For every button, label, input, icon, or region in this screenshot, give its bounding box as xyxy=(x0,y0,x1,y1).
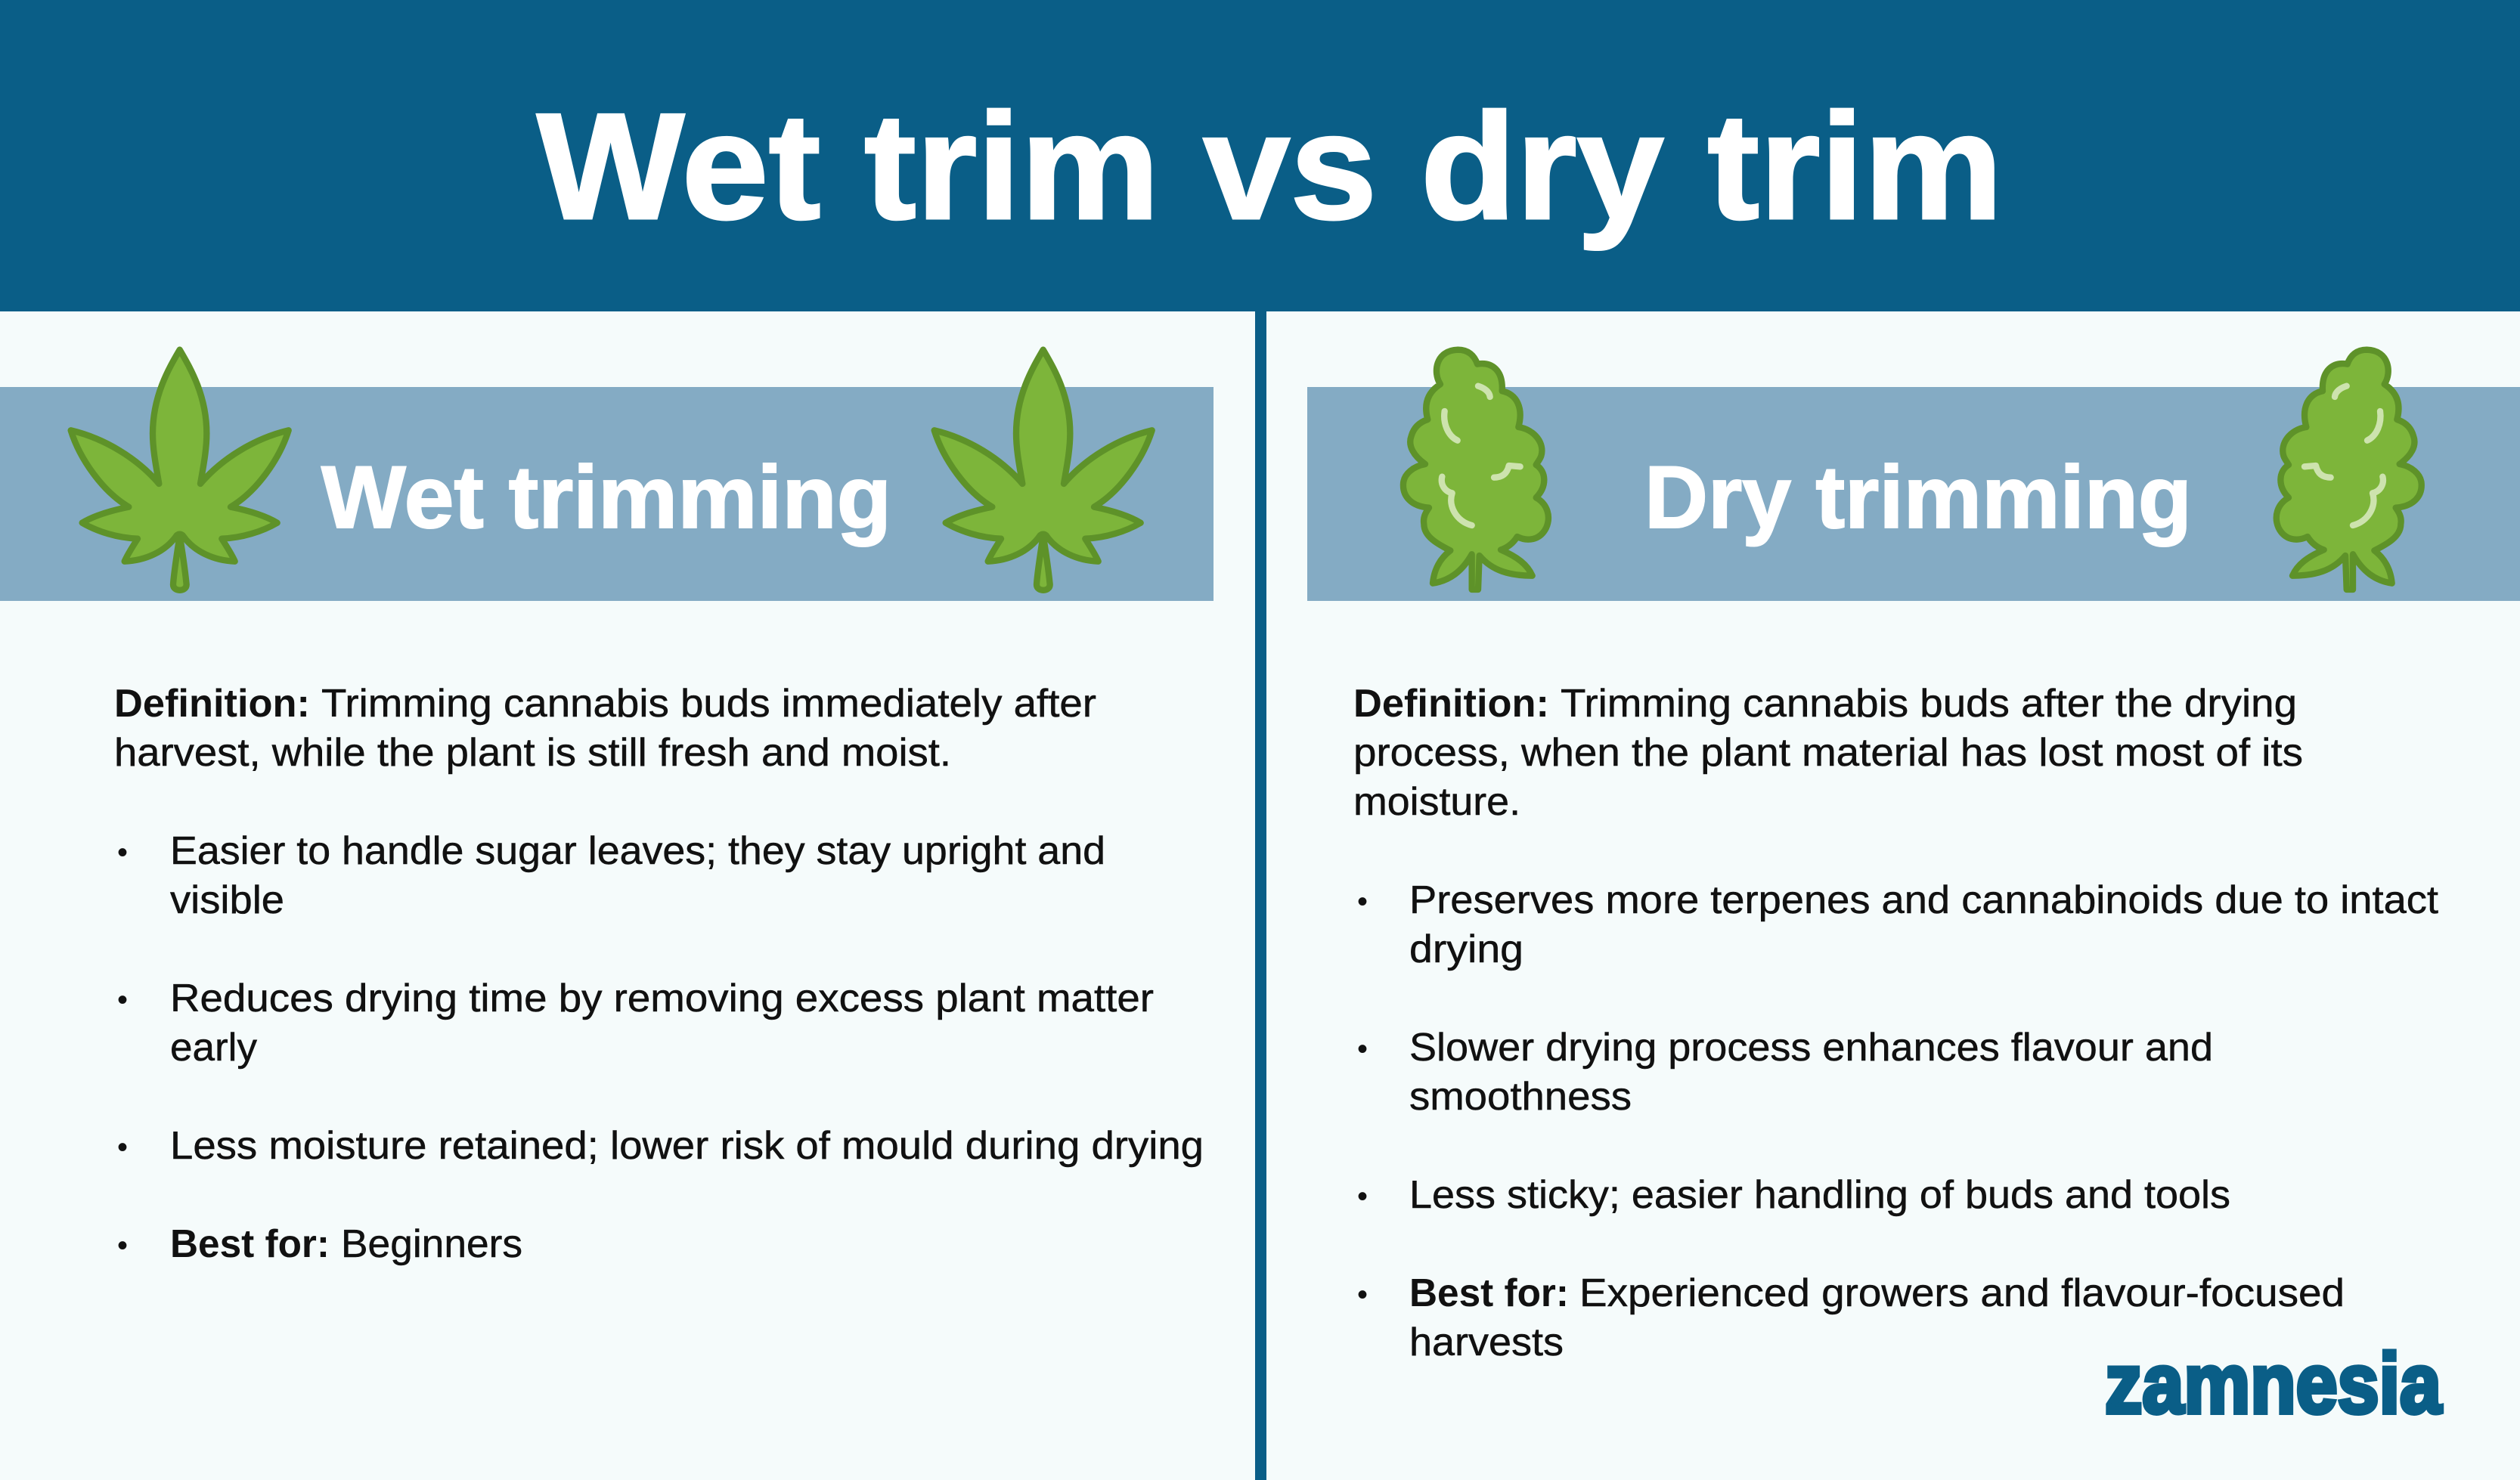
dry trimming best for: harvests xyxy=(1409,1321,1564,1364)
icon: cannabis bud left xyxy=(1403,350,1548,590)
dry trimming best for: • xyxy=(1357,1278,1368,1311)
dry trimming bullet 1: drying xyxy=(1409,927,1523,971)
title: Wet trim vs dry trim xyxy=(537,82,2003,251)
wet trimming bullet 2 xyxy=(117,977,1154,1070)
wet trimming bullet 2: early xyxy=(170,1026,257,1070)
wet trimming bullet 3: Less moisture retained; lower risk of mould during drying xyxy=(170,1124,1204,1168)
panel: dry trimming xyxy=(1307,350,2520,1364)
wet trimming bullet 1: • xyxy=(117,836,128,869)
dry trimming definition: process, when the plant material has lost most of its xyxy=(1353,731,2303,775)
dry trimming bullet 3: Less sticky; easier handling of buds and tools xyxy=(1409,1173,2230,1217)
wet trimming bullet 2: Reduces drying time by removing excess plant matter xyxy=(170,977,1154,1020)
dry trimming best for: Best for: xyxy=(1409,1271,1569,1315)
heading: dry trimming: Dry trimming xyxy=(1644,447,2192,546)
dry trimming bullet 1: Preserves more terpenes and cannabinoids due to intact xyxy=(1409,878,2439,922)
wet trimming bullet 1: Easier to handle sugar leaves; they stay upright and xyxy=(170,829,1105,873)
icon: cannabis leaf left xyxy=(71,350,289,590)
wet trimming definition: harvest, while the plant is still fresh and moist. xyxy=(114,731,951,775)
wet trimming bullet 2: • xyxy=(117,983,128,1017)
dry trimming bullet 1: • xyxy=(1357,885,1368,918)
wet trimming best for: Best for: xyxy=(170,1222,330,1266)
wet trimming best for: Beginners xyxy=(341,1222,522,1266)
heading: wet trimming: Wet trimming xyxy=(321,447,891,546)
dry trimming bullet 2: smoothness xyxy=(1409,1075,1632,1119)
header banner xyxy=(0,0,2520,311)
dry trimming definition xyxy=(1353,682,2303,824)
center divider xyxy=(1255,311,1266,1480)
dry trimming bullet 2: • xyxy=(1357,1033,1368,1066)
dry trimming bullet 2: Slower drying process enhances flavour and xyxy=(1409,1026,2213,1070)
wet trimming best for xyxy=(117,1222,522,1266)
dry trimming bullet 2 xyxy=(1357,1026,2213,1119)
wet trimming bullet 1: visible xyxy=(170,878,284,922)
wet trimming definition xyxy=(114,682,1096,775)
dry trimming best for: Experienced growers and flavour-focused xyxy=(1579,1271,2345,1315)
wet trimming heading band xyxy=(0,387,1214,601)
panel: wet trimming xyxy=(0,350,1214,1266)
wet trimming best for: • xyxy=(117,1229,128,1262)
dry trimming best for xyxy=(1357,1271,2345,1364)
dry trimming heading band xyxy=(1307,387,2520,601)
wet trimming definition: Definition: xyxy=(114,682,310,726)
wet trimming bullet 1 xyxy=(117,829,1105,922)
dry trimming definition: Trimming cannabis buds after the drying xyxy=(1561,682,2297,726)
wet trimming definition: Trimming cannabis buds immediately after xyxy=(321,682,1096,726)
logo: zamnesia: zamnesia xyxy=(2105,1336,2442,1431)
wet trimming bullet 3: • xyxy=(117,1131,128,1164)
icon: cannabis leaf right xyxy=(935,350,1152,590)
icon: cannabis bud right xyxy=(2277,350,2422,590)
dry trimming definition: Definition: xyxy=(1353,682,1549,726)
dry trimming bullet 1 xyxy=(1357,878,2439,971)
dry trimming definition: moisture. xyxy=(1353,780,1520,824)
dry trimming bullet 3: • xyxy=(1357,1180,1368,1213)
